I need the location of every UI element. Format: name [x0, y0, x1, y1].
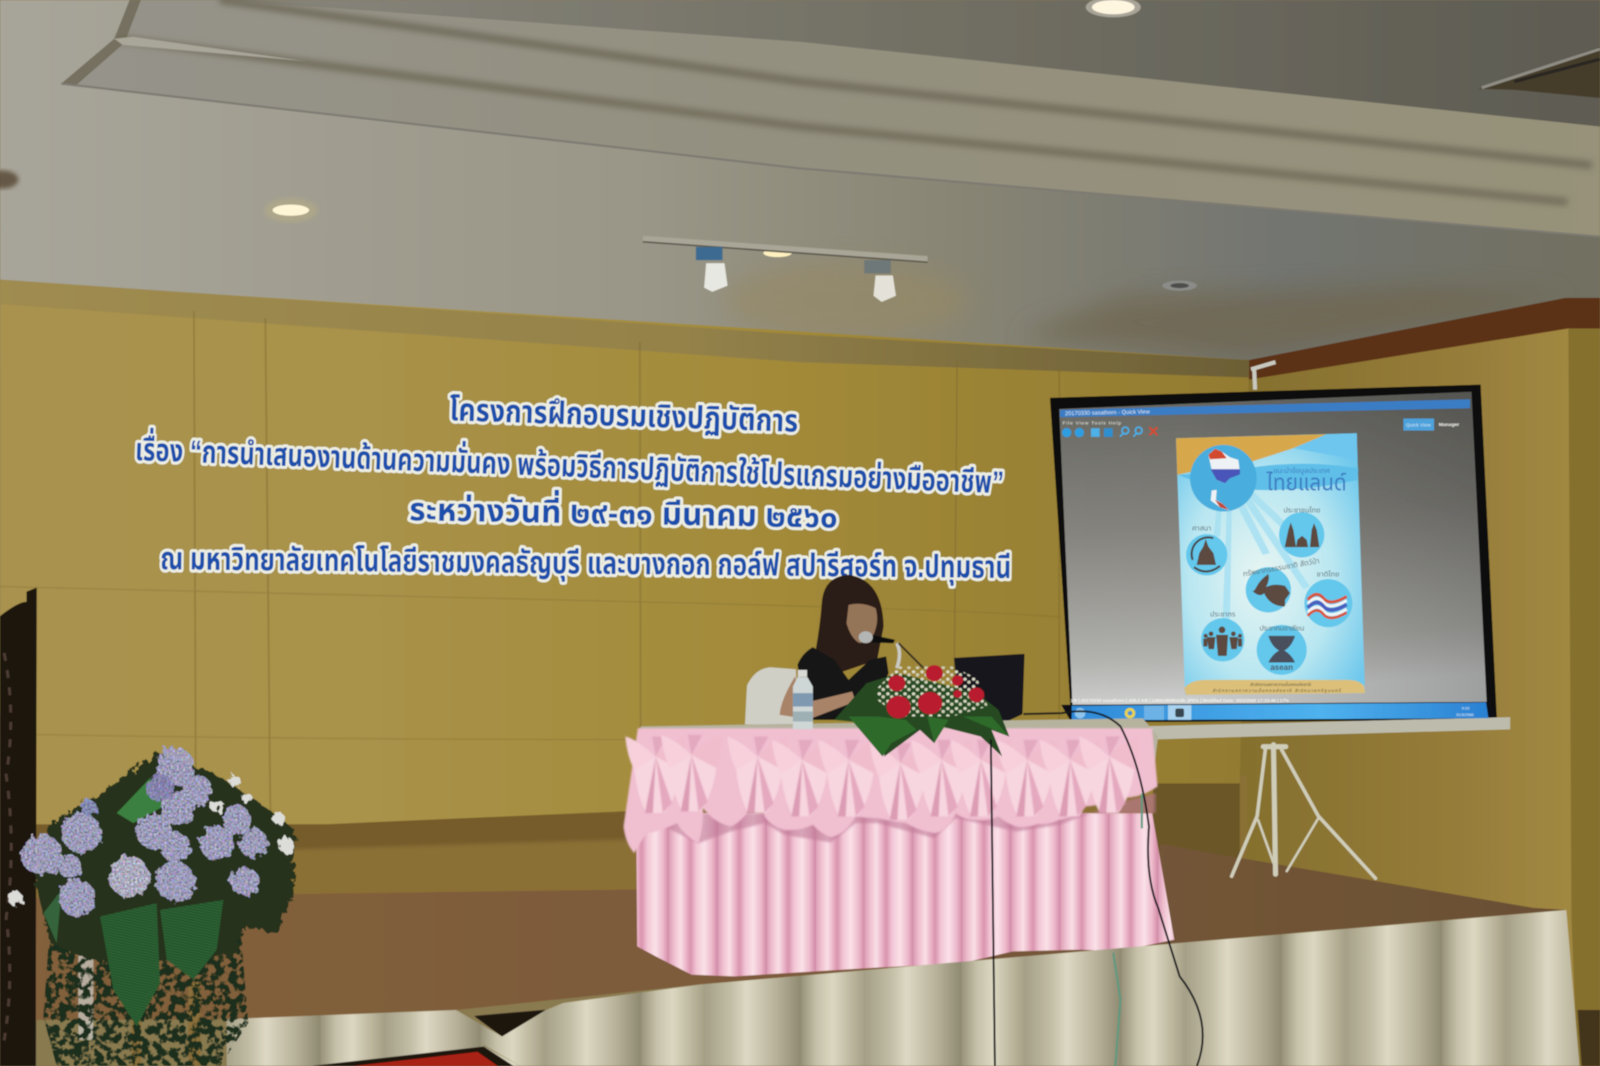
bottom right corner — [1578, 1010, 1600, 1066]
red low table — [311, 1047, 513, 1066]
bows — [625, 735, 1140, 820]
icon: people — [1201, 610, 1244, 661]
swags — [624, 728, 1158, 853]
track head left — [696, 247, 722, 260]
poster title: ไทยแลนด์ — [1266, 470, 1347, 496]
icon: asean: ประชาคมอาเซียน — [1259, 624, 1304, 632]
icon: people: ประชากร — [1210, 610, 1236, 619]
spot right — [873, 275, 896, 302]
icon: asean: asean — [1270, 663, 1293, 672]
menu bar text: File View Tools Help — [1063, 421, 1121, 427]
banner line 4: ณ มหาวิทยาลัยเทคโนโลยีราชมงคลธัญบุรี และบางกอก กอล์ฟ สปารีสอร์ท จ.ปทุมธานี — [160, 540, 1011, 586]
ceiling stepped bands — [61, 0, 1600, 237]
hair — [816, 575, 884, 673]
stage carpet — [29, 844, 1566, 1020]
lower wall below curtain — [31, 775, 1247, 918]
stage skirt — [227, 910, 1580, 1066]
ceiling lights — [264, 0, 1197, 291]
ceiling — [0, 0, 1600, 367]
poster footer: สำนักงานสภาความมั่นคงแห่งชาติ — [1250, 681, 1311, 687]
status bar text: 1/6 | 20170330 sasathorn | 439.2 KB | 2480x3508x24b JPEG | Modified Date: 30/3/2560 17:10:46 | 17% — [1071, 698, 1290, 703]
windows taskbar: 31/3/2560 — [1456, 712, 1475, 717]
track head right — [864, 260, 891, 273]
spot left — [704, 263, 728, 292]
track light — [643, 236, 928, 302]
banner line 1: โครงการฝึกอบรมเชิงปฏิบัติการ — [449, 391, 799, 439]
right wall — [1240, 298, 1600, 1066]
ceiling top tray — [130, 0, 1600, 126]
banner line 3: ระหว่างวันที่ ๒๙-๓๑ มีนาคม ๒๕๖๐ — [409, 487, 838, 535]
ceiling vent — [1479, 47, 1600, 98]
banner line 2: เรื่อง “การนำเสนองานด้านความมั่นคง พร้อมวิธีการปฏิบัติการใช้โปรแกรมอย่างมืออาชีพ” — [134, 427, 1005, 500]
white vase — [78, 940, 93, 1040]
poster title: แนะนำข้อมูลประเทศ — [1273, 466, 1330, 475]
curtain backdrop — [0, 280, 1249, 824]
icon: asean — [1257, 624, 1307, 675]
cables — [991, 711, 1203, 1066]
quick view button — [1403, 419, 1434, 431]
windows taskbar — [1072, 702, 1488, 720]
ferns — [43, 778, 223, 1026]
baby's breath — [877, 666, 988, 716]
projected application window — [1060, 399, 1488, 720]
arm — [780, 676, 856, 719]
manager tab: Manager — [1439, 422, 1459, 428]
warm glow near track — [724, 260, 969, 342]
person — [780, 575, 889, 720]
hydrangeas — [21, 747, 268, 917]
icon: buddha — [1186, 524, 1227, 576]
poster footer — [1184, 680, 1365, 695]
wood trim — [1249, 298, 1600, 379]
poster — [1176, 433, 1365, 695]
white flowers — [8, 775, 294, 905]
swag shadow — [636, 793, 1156, 843]
microphone — [859, 631, 924, 668]
face — [846, 604, 877, 643]
purple flower stand — [8, 747, 295, 1066]
icon: elephant — [1242, 556, 1320, 613]
left carved screen — [0, 588, 37, 1066]
screen support pole — [1251, 362, 1276, 390]
icon: wavy flag — [1304, 570, 1352, 627]
curtain valance — [0, 280, 1249, 377]
window title text: 20170330 sasathorn - Quick View — [1065, 409, 1151, 417]
hanging vines — [43, 923, 248, 1066]
window title bar — [1060, 399, 1470, 417]
red carnations — [886, 665, 984, 718]
laptop — [954, 654, 1024, 722]
green cable — [1113, 794, 1142, 1066]
left edge dark mark — [0, 170, 18, 189]
dark gap under stage — [474, 1010, 546, 1036]
poster footer: สำนักงานสภาความมั่นคงแห่งชาติ สำนักนายกรัฐมนตรี — [1213, 687, 1342, 693]
pleats — [636, 813, 1174, 976]
toolbar icons — [1062, 427, 1157, 437]
stand poles — [132, 980, 200, 1066]
foliage — [834, 673, 1009, 756]
map circle icon — [1190, 445, 1257, 512]
banner heading text — [134, 391, 1011, 586]
black blouse — [798, 647, 889, 720]
icon: elephant: ทรัพยากรธรรมชาติ สัตว์ป่า — [1242, 556, 1320, 578]
icon: buddha: ศาสนา — [1192, 524, 1211, 533]
icon: temples — [1279, 506, 1324, 558]
icon: temples: ประชาชนไทย — [1283, 506, 1320, 515]
dark foliage — [33, 753, 295, 963]
icon: wavy flag: ชาติไทย — [1317, 570, 1339, 579]
quick view button: Quick View — [1406, 423, 1431, 429]
light rays — [1213, 492, 1310, 620]
pink table skirt — [624, 728, 1174, 976]
projector tripod stand — [1232, 745, 1376, 878]
screen case bar — [1142, 717, 1510, 740]
chair — [745, 667, 798, 726]
water bottle — [793, 670, 813, 729]
projection screen — [1050, 385, 1510, 740]
table top — [633, 718, 1158, 775]
fern tips — [849, 716, 1009, 756]
table flower arrangement — [834, 665, 1009, 756]
windows taskbar: 9:20 — [1462, 705, 1470, 710]
